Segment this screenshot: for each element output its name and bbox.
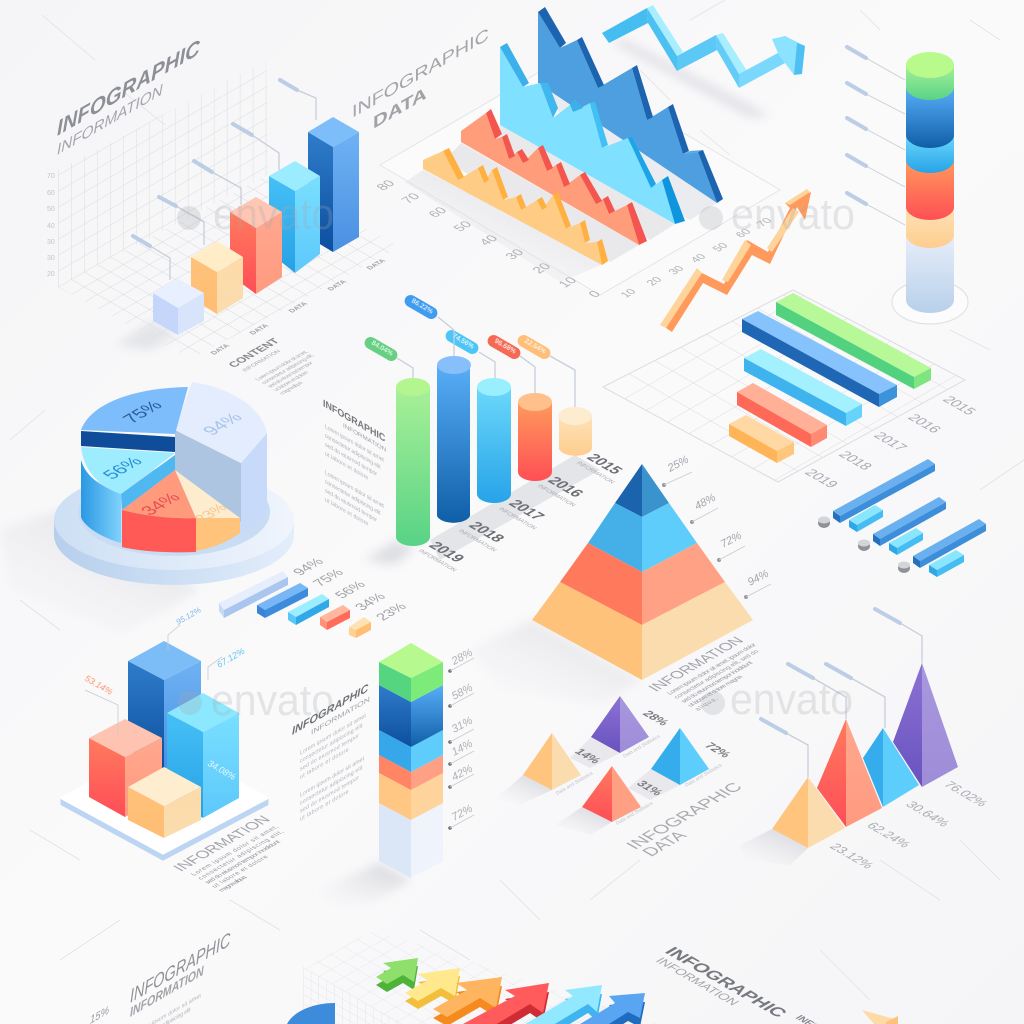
panel: bottom arrows grid	[287, 930, 660, 1024]
block: blue	[128, 641, 201, 770]
segment: red	[379, 755, 443, 790]
wall axis numbers: 60	[47, 190, 55, 197]
axis numbers: 20	[529, 261, 554, 276]
pie labels: 23%	[191, 501, 231, 525]
value labels: 62.24%	[863, 820, 915, 850]
year labels: INFORMATION	[416, 549, 457, 573]
block labels: 53.14%	[83, 673, 114, 697]
value callouts: 94%	[746, 568, 771, 589]
watermark: envato: envato	[731, 190, 855, 239]
callout pills: 22.54%	[523, 338, 548, 356]
category labels	[210, 258, 388, 356]
cylinder: green	[396, 378, 430, 546]
text block: content: magna aliqua	[279, 381, 305, 396]
series: coral	[461, 109, 647, 245]
panel: stacked cuboid	[292, 643, 475, 910]
callout lines	[847, 47, 905, 225]
percentage labels: 72%	[701, 740, 735, 760]
year labels: INFORMATION	[535, 484, 576, 508]
pie labels: 75%	[118, 398, 167, 426]
tier: cyan	[588, 503, 697, 572]
text block: bottom infographic information: INFOGRAPHIC	[661, 944, 791, 1020]
value labels	[826, 779, 992, 871]
axis numbers: 70	[398, 191, 423, 206]
year labels: 2015	[939, 393, 980, 417]
pyramid: red	[582, 766, 641, 822]
pie labels	[98, 398, 247, 525]
segment: blue	[906, 88, 954, 148]
text block: content: ut labore et dolore	[273, 370, 311, 393]
panel: bottom left text: INFORMATION	[130, 962, 204, 1020]
segment: cyan	[906, 135, 954, 173]
text block: content: Lorem ipsum dolor sit amet,	[255, 350, 310, 382]
year labels: INFORMATION	[496, 507, 537, 531]
callout pills: 84.04%	[370, 340, 395, 358]
wedge: 23%	[175, 470, 240, 551]
text block: information under pyramid: sed do eiusmod tempor incididunt	[680, 660, 755, 704]
panel: isometric pie chart	[0, 382, 294, 635]
text block: infographic information: sed do eiusmod tempor	[325, 488, 377, 524]
year labels: 2016	[904, 411, 945, 435]
text block: infographic information: ut labore et dolore	[300, 789, 349, 823]
axis numbers: 50	[450, 219, 475, 234]
text block: infographic information: ut labore et dolore	[325, 451, 369, 482]
shadows	[405, 83, 717, 282]
text block: content: consectetur adipiscing elit,	[261, 353, 316, 386]
segment: pale	[906, 235, 954, 313]
segment: cyan	[379, 730, 443, 772]
text block: information under blocks: consectetur adipiscing elit,	[197, 829, 286, 881]
arrow: green	[376, 958, 418, 992]
value callouts: 25%	[665, 454, 691, 475]
grid wall and floor	[58, 60, 400, 359]
panel: large pyramid group	[740, 609, 992, 871]
arrow: red	[463, 983, 549, 1024]
block: orange	[128, 767, 201, 838]
values: 94%	[289, 555, 327, 578]
callouts	[761, 609, 922, 777]
arrow: blue	[575, 993, 645, 1024]
text block: information under pyramid: Lorem ipsum dolor sit amet, ipsum dolor	[666, 642, 759, 696]
text block: infographic information: INFOGRAPHIC	[323, 398, 385, 445]
title: infographic information	[57, 35, 201, 159]
bar: cyan	[269, 161, 320, 273]
segment: peach	[906, 207, 954, 248]
value labels: 28%	[449, 647, 475, 668]
text block: information under pyramid: ut labore et dolore magna	[686, 674, 745, 708]
block labels	[83, 605, 246, 782]
block labels: 67.12%	[215, 646, 246, 670]
row 2	[858, 497, 946, 555]
category labels: DATA	[366, 258, 388, 271]
pie labels: 34%	[136, 490, 185, 518]
arrow: blue zigzag	[602, 5, 805, 118]
year labels: INFORMATION	[456, 529, 497, 553]
text block: infographic information: ut labore et dolore	[325, 497, 369, 528]
base ring	[892, 280, 968, 324]
percentage labels	[571, 708, 735, 798]
text block: infographic information: sed do eiusmod tempor	[300, 775, 359, 815]
base disc	[54, 468, 294, 585]
text block: infographic information: consectetur adipiscing elit	[325, 433, 381, 471]
pyramid: purple	[591, 696, 649, 753]
segment: orange	[379, 773, 443, 820]
text block: information under blocks: Lorem ipsum dolor sit amet,	[190, 824, 281, 877]
value callouts	[662, 454, 771, 599]
panel: small pyramids	[495, 696, 735, 835]
segment: navy	[379, 685, 443, 747]
text block: information under blocks: INFORMATION	[170, 813, 275, 874]
year labels: 2019	[425, 539, 468, 565]
text block: infographic information: INFOGRAPHIC	[292, 681, 369, 738]
callout tags	[133, 80, 316, 280]
bar: blue	[742, 311, 897, 407]
year labels: 2017	[505, 497, 548, 523]
block: cyan	[167, 693, 239, 818]
year labels: 2018	[465, 519, 508, 545]
pyramid: orange	[523, 733, 581, 790]
grid floor	[603, 290, 965, 482]
panel: pyramid	[470, 454, 771, 705]
panel: stacked cylinder	[847, 47, 968, 324]
text block: infographic information: consectetur adipiscing elit	[300, 765, 363, 807]
text block: information under pyramid	[645, 634, 787, 712]
watermark: envato	[177, 190, 855, 725]
values: 75%	[309, 566, 347, 589]
value labels: 30.64%	[902, 799, 954, 829]
arrow: cyan	[520, 985, 602, 1024]
tier: orange	[532, 582, 753, 680]
category labels: DATA	[210, 343, 232, 356]
text block: infographic information: ut labore et dolore	[300, 747, 349, 781]
block labels: 95.12%	[174, 605, 203, 627]
bar: red	[737, 383, 827, 447]
axis numbers: 10	[555, 275, 580, 290]
panel: mini bar legend	[219, 555, 410, 638]
series: light blue	[500, 43, 685, 224]
year labels: 2016	[544, 474, 587, 500]
small captions	[555, 733, 724, 827]
axis numbers: 0	[585, 288, 604, 300]
wall axis numbers: 40	[47, 223, 55, 230]
percentage labels: 28%	[639, 708, 673, 728]
value labels: 23.12%	[826, 841, 878, 871]
text block: infographic information: Lorem ipsum dolor sit amet	[300, 713, 366, 757]
wall axis numbers	[47, 173, 55, 278]
value labels: 72%	[450, 803, 475, 824]
value callouts: 72%	[719, 530, 744, 551]
axis numbers: 60	[425, 205, 450, 220]
pyramid: cyan	[863, 728, 919, 807]
text block: information under blocks	[170, 813, 308, 893]
tier: red	[560, 543, 725, 625]
year labels: 2019	[801, 466, 842, 490]
text block: infographic information: Lorem ipsum dolor sit amet	[325, 470, 384, 510]
platform	[62, 743, 267, 859]
text block: information under pyramid: INFORMATION	[645, 634, 748, 694]
bars	[219, 571, 371, 638]
text block: infographic information: sed do eiusmod tempor	[300, 733, 359, 773]
value labels: 14%	[450, 738, 475, 759]
callout pills: 86.22%	[410, 298, 435, 316]
segment: green	[379, 643, 443, 702]
small captions: Data and Statistics	[622, 733, 662, 760]
pyramid: cyan	[651, 728, 709, 785]
callout pills: 74.56%	[451, 333, 476, 351]
segment: red	[906, 160, 954, 220]
title: infographic information: INFOGRAPHIC	[57, 35, 201, 141]
block: red	[89, 719, 162, 817]
year labels: 2015	[583, 451, 626, 477]
panel: 3D bar chart on grid	[47, 35, 400, 396]
wall axis numbers: 30	[47, 255, 55, 262]
tier: navy	[615, 464, 669, 517]
row 1	[818, 459, 935, 532]
axis numbers: 60	[733, 227, 754, 240]
panel: small rising bars	[818, 459, 986, 577]
text block: information under blocks: ut labore et dolore	[210, 854, 271, 889]
text block: infographic information: sed do eiusmod tempor	[325, 442, 377, 478]
axis numbers: 70	[754, 216, 775, 229]
text block: bottom infographic information: INFORMATION	[652, 955, 742, 1008]
bar: orange	[729, 415, 794, 463]
year labels	[801, 393, 980, 490]
title: infographic data: DATA	[373, 83, 427, 133]
fragment: bottom right arrow	[792, 1010, 898, 1024]
axis numbers	[373, 178, 775, 300]
panel: 3D block chart	[62, 605, 267, 859]
percentage labels: 31%	[633, 778, 667, 798]
bar: green	[776, 293, 931, 389]
wall axis numbers: 20	[47, 271, 55, 278]
values: 34%	[351, 590, 389, 613]
cylinder: cyan	[477, 378, 511, 503]
arrow: yellow	[405, 968, 460, 1009]
bar: dark blue	[308, 117, 359, 252]
axis numbers: 30	[666, 264, 687, 277]
axis numbers: 10	[618, 287, 639, 300]
text block: information under pyramid: consectetur adipiscing elit, sed do	[673, 649, 761, 700]
callout pills	[362, 293, 575, 416]
pie labels: 56%	[98, 454, 147, 482]
wedge: 34%	[122, 470, 196, 552]
floor	[380, 60, 780, 295]
value labels: 42%	[450, 763, 475, 784]
pyramid: purple	[893, 663, 958, 787]
small captions: Data and Statistics	[684, 762, 724, 789]
category labels: DATA	[327, 279, 349, 292]
text block: content	[226, 337, 334, 396]
category labels: DATA	[249, 323, 271, 336]
text block: information under pyramid: aliqua.	[693, 696, 720, 712]
cylinder: peach	[558, 407, 592, 456]
wedge: 75%	[81, 387, 188, 452]
values	[289, 555, 410, 623]
watermark: envato: envato	[213, 190, 334, 239]
bar: cyan	[744, 349, 862, 426]
value labels: 31%	[450, 715, 475, 736]
pyramid: orange	[772, 777, 845, 848]
panel: bottom left text	[90, 929, 231, 1024]
text block: infographic data lower: DATA	[638, 828, 691, 859]
text block: information under blocks: magna aliqua.	[217, 874, 250, 893]
small captions: Data and Statistics	[615, 800, 655, 827]
title: infographic data: INFOGRAPHIC	[352, 24, 489, 122]
text block: infographic information: INFORMATION	[311, 696, 370, 737]
watermark: envato: envato	[211, 676, 334, 725]
text block: infographic information	[323, 398, 386, 537]
title: infographic data	[352, 24, 489, 133]
axis numbers: 50	[710, 241, 731, 254]
axis numbers: 30	[502, 247, 527, 262]
cylinder: blue	[437, 356, 471, 523]
axis numbers: 20	[644, 275, 665, 288]
text block: information under blocks: sed do eiusmod tempor incididunt	[204, 839, 282, 885]
text block: infographic information: INFORMATION	[343, 423, 386, 454]
text block: infographic information: consectetur adipiscing elit	[300, 723, 363, 765]
title: infographic information: INFORMATION	[57, 81, 163, 159]
year labels	[416, 451, 626, 573]
series: dark blue	[538, 7, 723, 203]
text block: infographic information	[292, 681, 370, 823]
pie fragment	[287, 1003, 335, 1024]
category labels: DATA	[288, 301, 310, 314]
value callouts: 48%	[693, 492, 718, 513]
small captions: Data and Statistics	[555, 770, 595, 797]
values: 23%	[372, 600, 410, 623]
block labels: 34.08%	[206, 758, 237, 782]
year labels: INFORMATION	[574, 461, 615, 485]
value labels: 58%	[450, 682, 475, 703]
text block: infographic information: consectetur adipiscing elit	[325, 479, 381, 517]
panel: cylinder bar chart	[323, 293, 626, 573]
watermark: envato: envato	[730, 675, 853, 724]
panel: horizontal isometric bars	[603, 290, 980, 490]
wall axis numbers: 30	[47, 239, 55, 246]
pyramid: red	[817, 719, 882, 827]
value labels	[448, 647, 475, 830]
cylinder: red	[518, 393, 552, 481]
values: 56%	[331, 578, 369, 601]
text block: infographic data lower: INFOGRAPHIC	[622, 780, 747, 852]
axis numbers: 40	[476, 233, 501, 248]
value labels: 76.02%	[940, 779, 992, 809]
bar: orange	[191, 241, 243, 314]
wall axis numbers: 70	[47, 173, 55, 180]
text block: content: sed do eiusmod tempor	[267, 361, 315, 389]
axis numbers: 40	[688, 252, 709, 265]
wall axis numbers: 50	[47, 206, 55, 213]
bar: red	[230, 197, 282, 294]
row 3	[898, 519, 986, 577]
text block: infographic information: Lorem ipsum dolor sit amet	[325, 424, 384, 464]
axis numbers: 80	[373, 178, 398, 193]
year labels: 2018	[835, 448, 876, 472]
arrow: orange rising zigzag	[660, 189, 811, 332]
bar: pale blue	[153, 279, 204, 335]
text block: content: CONTENT	[226, 337, 283, 370]
pie labels: 94%	[198, 410, 247, 438]
wedge: 56%	[81, 447, 175, 543]
year labels: 2017	[870, 429, 911, 453]
segment: pale	[379, 803, 443, 878]
percentage labels: 14%	[571, 746, 605, 766]
callout pills: 96.68%	[493, 338, 518, 356]
arrow: orange	[433, 977, 502, 1024]
segment: green	[906, 52, 954, 100]
text block: content: INFORMATION	[242, 349, 283, 373]
series: orange	[423, 148, 608, 265]
panel: bottom left text: INFOGRAPHIC	[130, 929, 231, 1008]
text block: infographic information: Lorem ipsum dolor sit amet	[300, 756, 364, 799]
wedge: 94% raised	[175, 382, 267, 533]
panel: jagged area chart	[352, 7, 780, 300]
